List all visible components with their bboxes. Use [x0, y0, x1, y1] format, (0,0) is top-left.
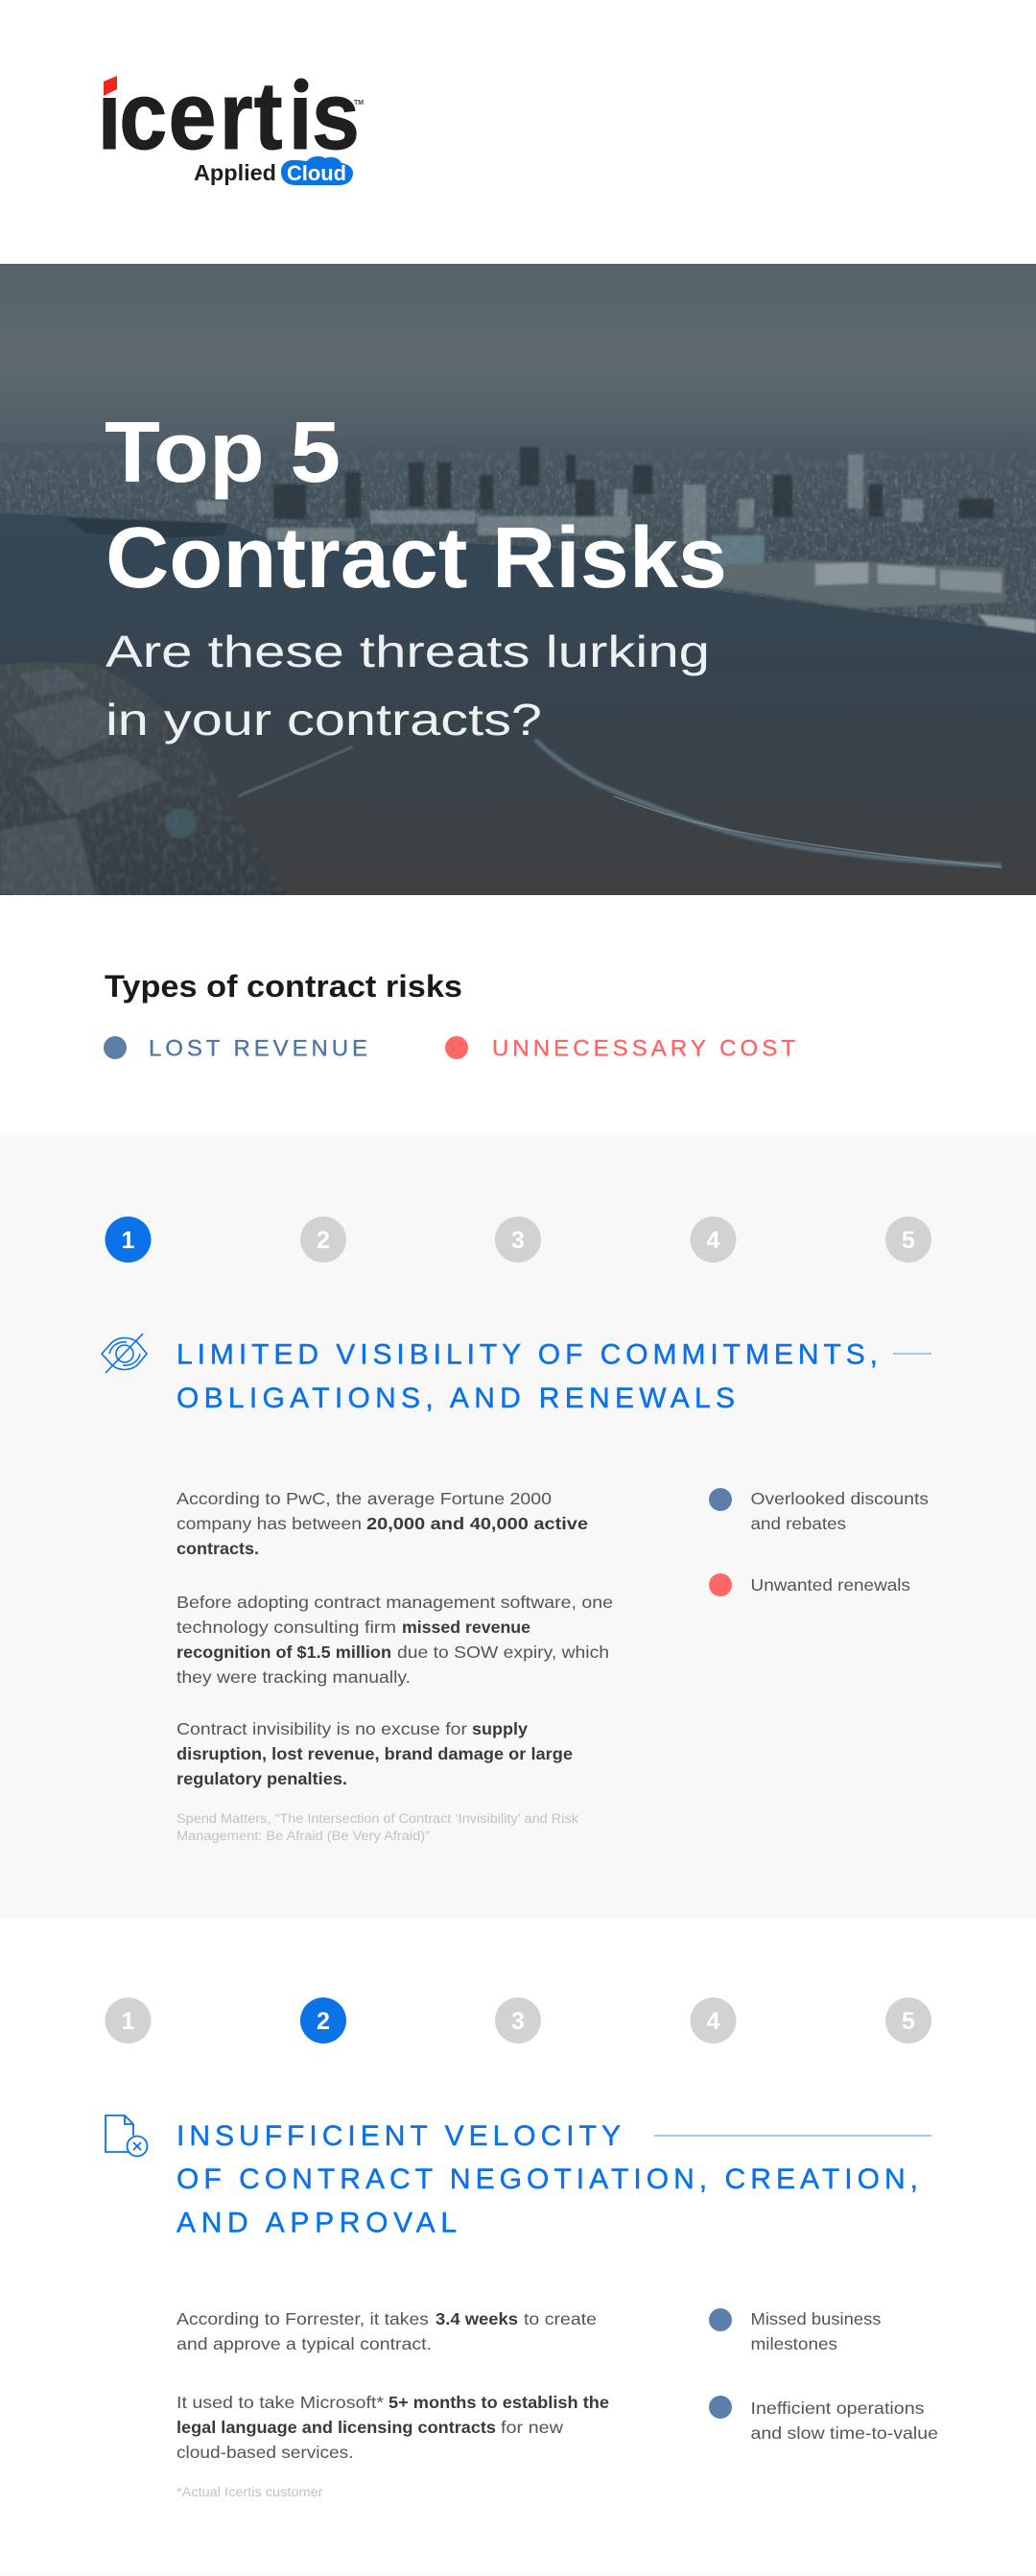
hero title	[105, 405, 727, 606]
step indicator 1: 1	[122, 1227, 135, 1254]
risk tag: inefficient operations: Inefficient operations	[750, 2399, 925, 2418]
body text: risk 2: 5+ months to establish the	[388, 2393, 609, 2412]
heading: types of contract risks: Types of contract risks	[105, 969, 462, 1004]
heading: limited visibility: LIMITED VISIBILITY OF COMMITMENTS,	[177, 1339, 878, 1370]
heading: insufficient velocity	[177, 2120, 918, 2239]
logo dot	[294, 79, 309, 92]
body text: risk 1: According to PwC, the average Fortune 2000	[177, 1489, 552, 1508]
footnote: *Actual Icertis customer	[177, 2485, 323, 2499]
body text: risk 1: supply	[472, 1719, 528, 1738]
body text: risk 1: Contract invisibility is no excuse for	[177, 1719, 467, 1738]
body text: risk 1: recognition of $1.5 million	[177, 1642, 391, 1662]
legend: unnecessary cost: UNNECESSARY COST	[492, 1036, 795, 1061]
hero subtitle	[106, 626, 710, 744]
step indicator 2: 1	[122, 2008, 135, 2035]
step indicator 1: 3	[511, 1227, 525, 1254]
panel: risk 1 limited visibility	[0, 1135, 1036, 1919]
step indicator 1	[106, 1217, 931, 1263]
panel: risk 2 insufficient velocity	[106, 1997, 938, 2499]
body text: risk 2	[177, 2309, 609, 2462]
icon: document with x	[106, 2115, 148, 2157]
step indicator 1: 4	[707, 1227, 720, 1254]
body text: risk 2: to create	[524, 2309, 597, 2328]
applied label: Applied	[194, 160, 276, 185]
body text: risk 2: 3.4 weeks	[436, 2309, 518, 2328]
cloud badge	[281, 156, 353, 185]
body text: risk 1	[177, 1489, 613, 1788]
body text: risk 1: they were tracking manually.	[177, 1667, 411, 1687]
risk tag: overlooked discounts: Overlooked discounts	[750, 1489, 929, 1508]
risk tag: unwanted renewals: Unwanted renewals	[750, 1575, 910, 1595]
heading: limited visibility: OBLIGATIONS, AND RENEWALS	[177, 1383, 735, 1414]
body text: risk 1: company has between	[177, 1514, 362, 1533]
step indicator 2: 2	[317, 2008, 330, 2035]
icon: crossed-out eye	[102, 1334, 147, 1373]
body text: risk 2: cloud-based services.	[177, 2443, 353, 2462]
hero image: aerial city and bay	[0, 264, 1036, 897]
trademark: TM	[354, 100, 364, 106]
hero title: Top 5	[105, 405, 341, 501]
body text: risk 1: regulatory penalties.	[177, 1769, 347, 1788]
risk tag: missed milestones	[709, 2308, 882, 2353]
source note: Spend Matters, “The Intersection of Contract ‘Invisibility’ and Risk	[177, 1811, 578, 1826]
step indicator 1: 2	[317, 1227, 330, 1254]
step indicator 2: 4	[707, 2008, 720, 2035]
cloud badge: Cloud	[287, 161, 346, 185]
logo wordmark: icertis	[98, 63, 360, 170]
heading: insufficient velocity: OF CONTRACT NEGOTIATION, CREATION,	[177, 2163, 918, 2195]
risk tag: unwanted renewals	[709, 1573, 910, 1596]
risk tag: missed milestones: milestones	[750, 2334, 837, 2353]
step indicator 1: 5	[902, 1227, 915, 1254]
step indicator 2	[106, 1997, 931, 2044]
heading: insufficient velocity: AND APPROVAL	[177, 2207, 457, 2239]
heading: limited visibility	[177, 1339, 878, 1414]
body text: risk 2: legal language and licensing contracts	[177, 2418, 496, 2437]
body text: risk 2: It used to take Microsoft*	[177, 2393, 384, 2412]
hero subtitle: Are these threats lurking	[106, 626, 710, 676]
risk tag: inefficient operations	[709, 2396, 938, 2443]
risk tag: overlooked discounts	[709, 1488, 929, 1533]
hero title: Contract Risks	[106, 510, 727, 606]
body text: risk 1: contracts.	[177, 1539, 259, 1558]
body text: risk 1: disruption, lost revenue, brand damage or large	[177, 1744, 573, 1763]
risk tag: overlooked discounts: and rebates	[750, 1514, 846, 1533]
body text: risk 1: missed revenue	[402, 1618, 530, 1637]
body text: risk 1: technology consulting firm	[177, 1618, 396, 1637]
source note: Management: Be Afraid (Be Very Afraid)”	[177, 1829, 430, 1843]
risk tag: inefficient operations: and slow time-to-value	[750, 2423, 938, 2443]
hero subtitle: in your contracts?	[106, 695, 542, 744]
body text: risk 2: According to Forrester, it takes	[177, 2309, 429, 2328]
heading: insufficient velocity: INSUFFICIENT VELOCITY	[177, 2120, 621, 2152]
step indicator 2: 3	[511, 2008, 525, 2035]
logo: Icertis Applied Cloud	[96, 63, 364, 185]
body text: risk 2: for new	[501, 2418, 563, 2437]
source note	[177, 1811, 578, 1843]
body text: risk 1: due to SOW expiry, which	[397, 1642, 609, 1662]
logo accent: red mark	[104, 76, 117, 96]
legend: lost revenue: LOST REVENUE	[149, 1036, 367, 1061]
step indicator 2: 5	[902, 2008, 915, 2035]
body text: risk 2: and approve a typical contract.	[177, 2334, 432, 2353]
body text: risk 1: Before adopting contract management software, one	[177, 1593, 613, 1612]
body text: risk 1: 20,000 and 40,000 active	[366, 1514, 588, 1533]
risk tag: missed milestones: Missed business	[750, 2309, 882, 2328]
